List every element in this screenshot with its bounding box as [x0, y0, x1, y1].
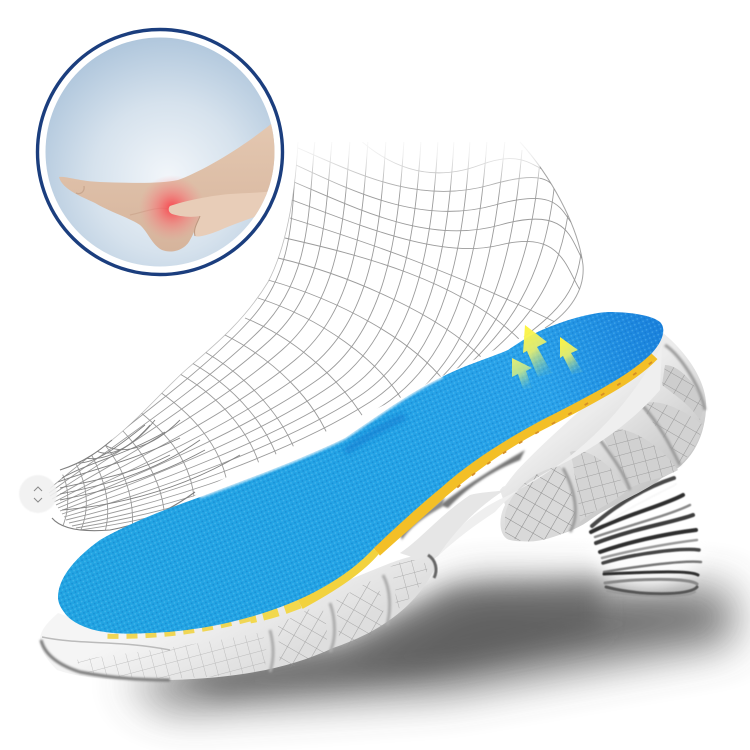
foot outline: [52, 142, 583, 531]
dense toe lines: [58, 438, 180, 482]
blue insole: [58, 312, 663, 634]
arrow: right: [560, 337, 583, 374]
photo background: [40, 30, 280, 270]
rear rib shading: [563, 345, 705, 532]
rear sole and bridge: [395, 332, 706, 565]
cross rings: [62, 474, 68, 526]
rear outsole: [500, 332, 706, 541]
arch highlight: [200, 377, 442, 497]
wireframe top fade: [285, 135, 540, 195]
UI scroll button: [19, 475, 57, 513]
arrow: left: [512, 358, 532, 389]
spring: [590, 478, 706, 596]
toe dark edge: [41, 640, 170, 680]
toe shading: [76, 186, 84, 194]
wireframe foot: [40, 140, 600, 540]
dark joint: [428, 555, 436, 578]
white cut-out near forefoot: [395, 510, 443, 551]
strut under arch: [400, 490, 505, 565]
fill: [40, 140, 600, 540]
lower leg and foot: [59, 120, 280, 252]
tread: [75, 632, 266, 679]
ground shadow: [125, 580, 735, 708]
yellow foam edge: [100, 354, 652, 636]
pain glow: [144, 178, 198, 236]
hand: [168, 192, 268, 236]
dark gap under insole: [440, 450, 525, 508]
support arrows: [512, 325, 583, 389]
bridge strip: [425, 345, 662, 565]
ribs: [270, 575, 390, 672]
arrow: large centre: [523, 325, 552, 377]
white cut-out near arch: [472, 440, 542, 491]
rear tread pads: [505, 466, 575, 542]
inset circle: heel pain: [38, 30, 282, 274]
front sole: [40, 555, 436, 680]
